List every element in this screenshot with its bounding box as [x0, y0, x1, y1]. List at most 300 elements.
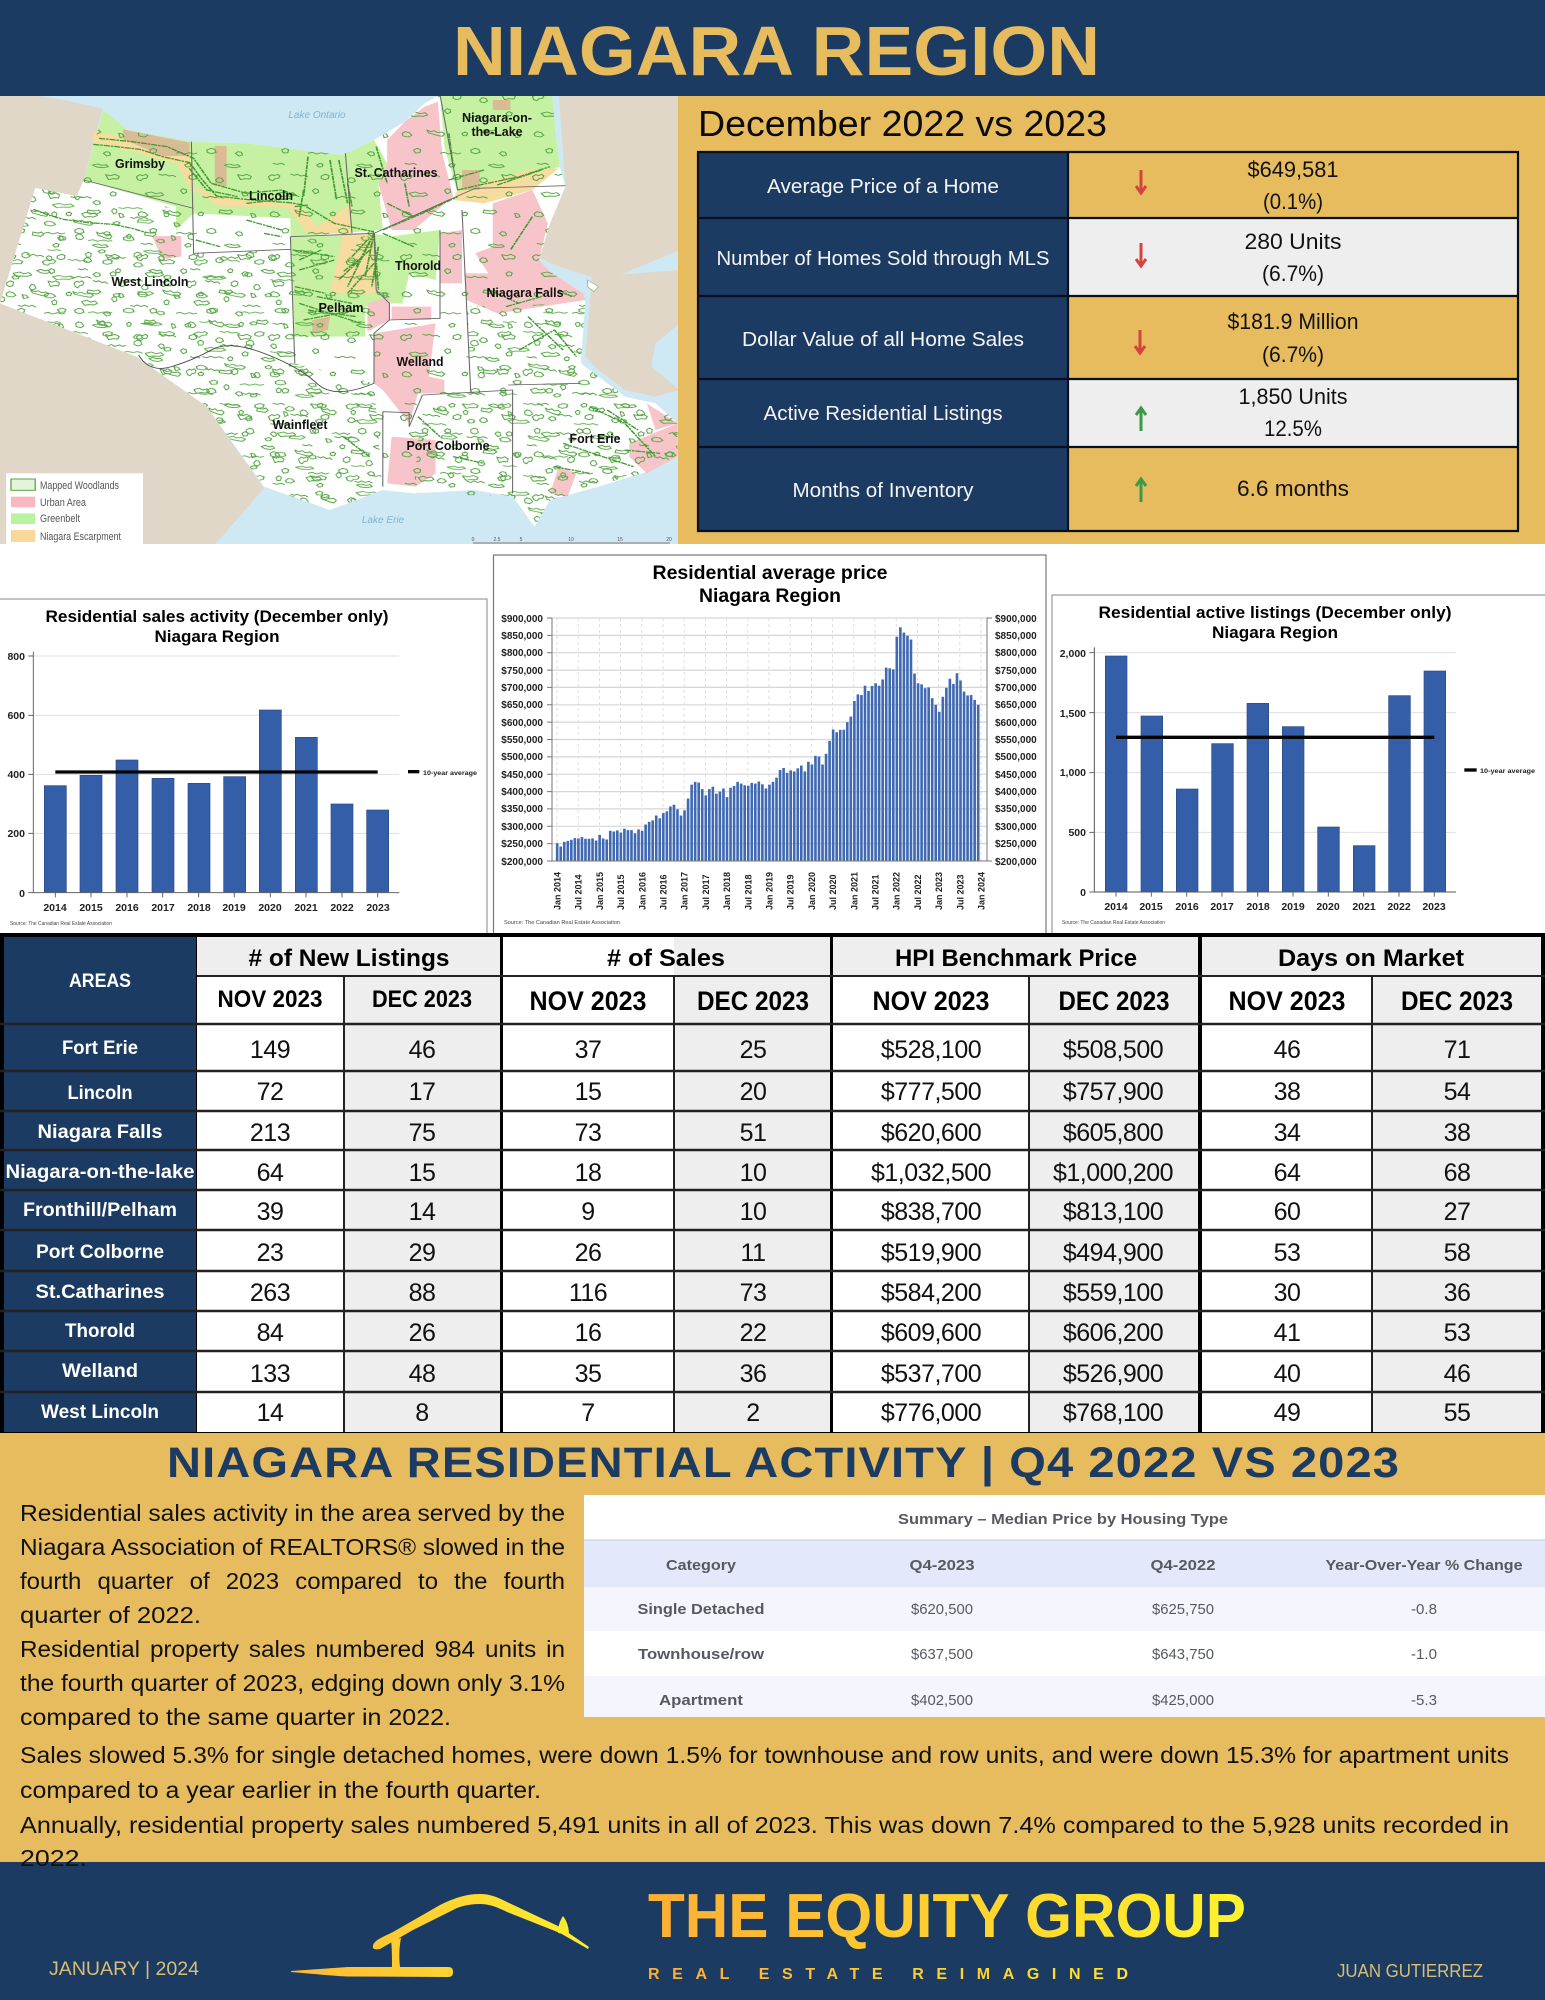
row: dollar value: (6.7%): [1262, 342, 1324, 367]
row: Welland: 133: [250, 1360, 290, 1388]
row: St.Catharines: 263: [250, 1279, 290, 1307]
chart title: Residential active listings (December only): [1098, 603, 1452, 622]
row: West Lincoln: 49: [1274, 1399, 1300, 1427]
row: St.Catharines: $559,100: [1063, 1279, 1163, 1307]
panel: Q4 residential activity: [0, 1433, 1545, 1863]
row: Fronthill/Pelham: $813,100: [1063, 1198, 1163, 1226]
row: average price: [767, 157, 1338, 214]
map scale bar: 5: [520, 537, 523, 543]
row: active listings: 12.5%: [1264, 416, 1322, 441]
map place names: Thorold: [395, 258, 441, 273]
axis labels: 400: [7, 769, 25, 781]
key figures table: [698, 152, 1518, 531]
row: Fronthill/Pelham: 27: [1444, 1198, 1470, 1226]
row: Fort Erie: 71: [1444, 1036, 1470, 1064]
logo tagline: REAL ESTATE REIMAGINED: [648, 1966, 1128, 1983]
chart: residential active listings: [1052, 595, 1545, 939]
source note: Source: The Canadian Real Estate Association: [10, 921, 112, 927]
areas column heading: AREAS: [69, 971, 131, 992]
summary table: median price by housing type: Single Detached: [638, 1601, 764, 1618]
panel: area statistics table: [0, 933, 1545, 1433]
date axis: Jan 2021: [849, 872, 859, 910]
axis labels: 2017: [1210, 901, 1234, 913]
row: months of inventory: [792, 476, 1349, 502]
row: homes sold: [716, 229, 1342, 286]
logo: house roof mark: [291, 1894, 589, 1977]
date axis: Jul 2016: [658, 874, 668, 910]
summary table: median price by housing type: $637,500: [911, 1646, 973, 1663]
chart title: Residential sales activity (December only): [46, 607, 388, 626]
date axis: Jul 2018: [743, 874, 753, 910]
row: Welland: 46: [1444, 1360, 1470, 1388]
row: active listings: [764, 384, 1348, 441]
summary table: median price by housing type: Apartment: [659, 1692, 743, 1709]
row: West Lincoln: West Lincoln: [41, 1402, 159, 1423]
row: St.Catharines: St.Catharines: [36, 1282, 164, 1303]
summary table: median price by housing type: Year-Over-Year % Change: [1326, 1557, 1522, 1574]
row: dollar value: Dollar Value of all Home Sales: [742, 329, 1024, 351]
row: Port Colborne: 23: [257, 1239, 283, 1267]
axis labels: [1060, 648, 1446, 913]
date axis: Jan 2014: [552, 872, 562, 910]
table group headings: HPI Benchmark Price: [895, 945, 1137, 972]
row: Thorold: 84: [257, 1319, 284, 1347]
body copy: residential activity narrative: Niagara Association of REALTORS® slowed in the: [20, 1534, 565, 1560]
axis labels: 0: [19, 888, 25, 900]
map place names: Niagara-on-: [462, 110, 532, 125]
row: Niagara-on-the-lake: Niagara-on-the-lake: [6, 1162, 194, 1183]
map place names: Pelham: [318, 300, 364, 315]
date axis: Jan 2019: [764, 872, 774, 910]
row: Welland: $526,900: [1063, 1360, 1163, 1388]
row: Niagara-on-the-lake: 68: [1444, 1159, 1470, 1187]
axis labels: 2018: [1246, 901, 1270, 913]
row: dollar value: [742, 309, 1358, 367]
row: West Lincoln: 14: [257, 1399, 284, 1427]
row: Fort Erie: 37: [575, 1036, 601, 1064]
axis labels: 2017: [151, 902, 175, 914]
table month headings: NOV 2023: [1228, 986, 1346, 1016]
table group headings: # of New Listings: [248, 945, 450, 972]
left price axis: $300,000: [501, 822, 543, 833]
right price axis: $750,000: [995, 666, 1037, 677]
axis labels: 2021: [294, 902, 318, 914]
row: Niagara-on-the-lake: 64: [257, 1159, 284, 1187]
map legend labels: Greenbelt: [40, 513, 80, 525]
source note: Source: The Canadian Real Estate Association: [1062, 920, 1165, 926]
left price axis: $650,000: [501, 700, 543, 711]
row: Port Colborne: Port Colborne: [36, 1242, 164, 1263]
body copy: residential activity narrative: 2022.: [20, 1845, 87, 1871]
row: Lincoln: 54: [1444, 1078, 1471, 1106]
right price axis: $550,000: [995, 735, 1037, 746]
chart: residential sales activity: [0, 599, 487, 939]
table group headings: # of Sales: [607, 945, 725, 972]
axis labels: 2015: [79, 902, 103, 914]
row: Fort Erie: 46: [409, 1036, 435, 1064]
map place names: St. Catharines: [354, 165, 438, 180]
summary table: median price by housing type: -5.3: [1411, 1692, 1437, 1709]
row: West Lincoln: 55: [1444, 1399, 1470, 1427]
map place names: [112, 110, 620, 526]
date axis: Jan 2018: [722, 872, 732, 910]
map scale bar: 2.5: [494, 537, 501, 543]
body copy: residential activity narrative: [20, 1500, 1509, 1871]
row: Thorold: $609,600: [881, 1319, 981, 1347]
chart title: Residential average price: [652, 563, 888, 584]
body copy: residential activity narrative: fourth quarter of 2023 compared to the fourth: [20, 1568, 565, 1594]
row: Fort Erie: $528,100: [881, 1036, 981, 1064]
axis labels: 500: [1068, 827, 1086, 839]
section heading: NIAGARA RESIDENTIAL ACTIVITY | Q4 2022 VS 2023: [167, 1439, 1400, 1487]
row: West Lincoln: 2: [746, 1399, 760, 1427]
row: Welland: $537,700: [881, 1360, 981, 1388]
row: Niagara Falls: $620,600: [881, 1119, 981, 1147]
date axis: Jul 2014: [574, 874, 584, 910]
axis labels: 2022: [330, 902, 354, 914]
map legend labels: Urban Area: [40, 497, 87, 509]
row: Fronthill/Pelham: 39: [257, 1198, 283, 1226]
row: homes sold: Number of Homes Sold through MLS: [716, 248, 1050, 270]
row: Fronthill/Pelham: 10: [740, 1198, 766, 1226]
row: Lincoln: 15: [575, 1078, 601, 1106]
map scale bar: 15: [617, 537, 623, 543]
row: St.Catharines: $584,200: [881, 1279, 981, 1307]
map place names: Wainfleet: [272, 417, 328, 432]
summary table: median price by housing type: Q4-2022: [1150, 1557, 1216, 1574]
row: Port Colborne: $519,900: [881, 1239, 981, 1267]
map scale bar: 0: [472, 537, 475, 543]
right price axis: $650,000: [995, 700, 1037, 711]
row: Niagara-on-the-lake: $1,000,200: [1053, 1159, 1173, 1187]
map place names: Lake Erie: [362, 515, 405, 526]
row: Port Colborne: $494,900: [1063, 1239, 1163, 1267]
row: Lincoln: [68, 1078, 1471, 1106]
row: Niagara-on-the-lake: $1,032,500: [871, 1159, 991, 1187]
footer banner: [0, 1862, 1545, 2000]
row: Lincoln: 72: [257, 1078, 283, 1106]
row: St.Catharines: 30: [1274, 1279, 1300, 1307]
row: Fronthill/Pelham: Fronthill/Pelham: [23, 1200, 177, 1221]
10-year average line: [1116, 732, 1434, 742]
row: Thorold: 41: [1274, 1319, 1300, 1347]
row: Niagara Falls: Niagara Falls: [38, 1122, 162, 1143]
row: average price: Average Price of a Home: [767, 176, 999, 198]
map place names: Fort Erie: [570, 431, 620, 446]
row: Niagara Falls: 73: [575, 1119, 601, 1147]
row: Fort Erie: 149: [250, 1036, 290, 1064]
row: Fronthill/Pelham: [23, 1198, 1470, 1226]
grid: [552, 618, 987, 844]
row: Thorold: $606,200: [1063, 1319, 1163, 1347]
date axis: Jan 2022: [892, 872, 902, 910]
title: NIAGARA REGION: [453, 12, 1100, 90]
row: Port Colborne: 29: [409, 1239, 435, 1267]
axis labels: 2019: [1281, 901, 1305, 913]
date axis: Jan 2015: [595, 872, 605, 910]
table month headings: NOV 2023: [872, 986, 990, 1016]
row: Fort Erie: Fort Erie: [62, 1038, 138, 1059]
row: homes sold: 280 Units: [1244, 229, 1342, 254]
row: active listings: Active Residential Listings: [764, 403, 1002, 425]
row: Niagara Falls: 75: [409, 1119, 435, 1147]
row: St.Catharines: 88: [409, 1279, 435, 1307]
body copy: residential activity narrative: compared to a year earlier in the fourth quarter.: [20, 1777, 541, 1803]
row: Thorold: 53: [1444, 1319, 1470, 1347]
date axis: Jul 2019: [786, 874, 796, 910]
table group headings: Days on Market: [1278, 945, 1464, 972]
left price axis: $350,000: [501, 804, 543, 815]
axis labels: 200: [7, 828, 25, 840]
axis labels: 600: [7, 710, 25, 722]
table month headings: NOV 2023: [530, 986, 646, 1016]
summary table: median price by housing type: $620,500: [911, 1601, 973, 1618]
date axis: Jan 2023: [934, 872, 944, 910]
body copy: residential activity narrative: Annually, residential property sales numbered 5,491 units in all of 2023. This was down 7.4% compared to the 5,928 units recorded in: [20, 1812, 1509, 1838]
date axis: Jul 2022: [913, 874, 923, 910]
axis labels: 2016: [1175, 901, 1199, 913]
chart: residential average price: [494, 555, 1046, 935]
body copy: residential activity narrative: compared to the same quarter in 2022.: [20, 1704, 451, 1730]
axis labels: 2019: [222, 902, 246, 914]
summary table: median price by housing type: -1.0: [1411, 1646, 1437, 1663]
right price axis: $450,000: [995, 770, 1037, 781]
row: Fort Erie: 25: [740, 1036, 766, 1064]
table month headings: NOV 2023: [218, 986, 322, 1013]
row: Thorold: [65, 1319, 1470, 1347]
date axis: Jul 2020: [828, 874, 838, 910]
row: St.Catharines: 36: [1444, 1279, 1470, 1307]
row: Lincoln: $777,500: [881, 1078, 981, 1106]
date axis: Jul 2021: [870, 874, 880, 910]
axis labels: 2014: [43, 902, 67, 914]
right price axis: $700,000: [995, 683, 1037, 694]
row: Niagara Falls: 34: [1274, 1119, 1301, 1147]
row: Port Colborne: 58: [1444, 1239, 1470, 1267]
left price axis: $600,000: [501, 718, 543, 729]
row: Niagara Falls: 38: [1444, 1119, 1470, 1147]
axis labels: 2016: [115, 902, 139, 914]
row: Niagara Falls: [38, 1119, 1470, 1147]
date axis: [552, 872, 986, 910]
row: West Lincoln: 7: [581, 1399, 595, 1427]
row: St.Catharines: [36, 1279, 1470, 1307]
row: St.Catharines: 73: [740, 1279, 766, 1307]
body copy: residential activity narrative: Residential property sales numbered 984 units in: [20, 1636, 565, 1662]
summary table: median price by housing type: $625,750: [1152, 1601, 1214, 1618]
right price axis: $300,000: [995, 822, 1037, 833]
map place names: Port Colborne: [406, 438, 490, 453]
axis labels: [7, 651, 390, 914]
date axis: Jan 2016: [637, 872, 647, 910]
body copy: residential activity narrative: quarter of 2022.: [20, 1602, 201, 1628]
table group headings: [248, 945, 1464, 972]
body copy: residential activity narrative: Residential sales activity in the area served by the: [20, 1500, 565, 1526]
map of the Niagara Region: [0, 95, 680, 544]
row: months of inventory: 6.6 months: [1237, 476, 1349, 501]
map place names: Lake Ontario: [288, 110, 346, 121]
map place names: Lincoln: [249, 188, 293, 203]
chart: residential active listings: Niagara Region: [1212, 623, 1338, 642]
row: Lincoln: 38: [1274, 1078, 1300, 1106]
axis labels: 2,000: [1060, 648, 1086, 660]
row: Thorold: 22: [740, 1319, 766, 1347]
right price axis: $350,000: [995, 804, 1037, 815]
map scale bar: 20: [666, 537, 672, 543]
map legend labels: Mapped Woodlands: [40, 480, 119, 492]
10-year average line: [55, 767, 378, 777]
row: Thorold: 26: [409, 1319, 435, 1347]
summary table: median price by housing type: Q4-2023: [910, 1557, 974, 1574]
axis labels: 2021: [1352, 901, 1376, 913]
bars and axes: [28, 652, 419, 897]
row: Port Colborne: [36, 1239, 1470, 1267]
summary table: median price by housing type: -0.8: [1411, 1601, 1437, 1618]
date axis: Jul 2015: [616, 874, 626, 910]
left price axis: $400,000: [501, 787, 543, 798]
row: active listings: 1,850 Units: [1238, 384, 1348, 409]
row: Niagara-on-the-lake: 64: [1274, 1159, 1301, 1187]
date axis: Jan 2017: [680, 872, 690, 910]
row: Fort Erie: $508,500: [1063, 1036, 1163, 1064]
row: Lincoln: $757,900: [1063, 1078, 1163, 1106]
row: Fort Erie: 46: [1274, 1036, 1300, 1064]
row: Thorold: Thorold: [65, 1321, 135, 1342]
left price axis: $750,000: [501, 666, 543, 677]
row: Fronthill/Pelham: 14: [409, 1198, 436, 1226]
summary table: median price by housing type: $402,500: [911, 1692, 973, 1709]
row: Welland: 40: [1274, 1360, 1300, 1388]
chart: residential active listings: 10-year average: [1480, 768, 1535, 775]
left price axis: $850,000: [501, 631, 543, 642]
left price axis: $200,000: [501, 857, 543, 868]
row: Niagara-on-the-lake: 15: [409, 1159, 435, 1187]
row: Welland: [62, 1360, 1470, 1388]
summary table: median price by housing type: $425,000: [1152, 1692, 1214, 1709]
right price axis: $850,000: [995, 631, 1037, 642]
bars and axes: [1089, 647, 1477, 897]
monthly price bars: [556, 627, 980, 861]
left price axis: $550,000: [501, 735, 543, 746]
row: Lincoln: 20: [740, 1078, 766, 1106]
map place names: the-Lake: [472, 124, 522, 139]
row: homes sold: (6.7%): [1262, 261, 1324, 286]
map place names: West Lincoln: [112, 274, 189, 289]
axes: [547, 618, 992, 861]
body copy: residential activity narrative: Sales slowed 5.3% for single detached homes, were down 1.5% for townhouse and row units, and were down 15.3% for apartment units: [20, 1742, 1509, 1768]
body copy: residential activity narrative: the fourth quarter of 2023, edging down only 3.1%: [20, 1670, 565, 1696]
row: Lincoln: 17: [409, 1078, 435, 1106]
map scale bar: [472, 537, 672, 543]
logo wordmark: THE EQUITY GROUP: [648, 1882, 1246, 1951]
right price axis: [995, 614, 1037, 868]
row: Lincoln: Lincoln: [68, 1083, 132, 1104]
right price axis: $200,000: [995, 857, 1037, 868]
row: West Lincoln: $776,000: [881, 1399, 981, 1427]
left price axis: $700,000: [501, 683, 543, 694]
map scale bar: 10: [568, 537, 574, 543]
panel: December 2022 vs 2023: [678, 96, 1545, 544]
left price axis: $500,000: [501, 752, 543, 763]
axis labels: 2014: [1104, 901, 1128, 913]
summary table: median price by housing type: Summary – Median Price by Housing Type: [898, 1511, 1228, 1528]
left price axis: $450,000: [501, 770, 543, 781]
axis labels: 2018: [187, 902, 211, 914]
row: dollar value: $181.9 Million: [1228, 309, 1358, 334]
row: Fronthill/Pelham: $838,700: [881, 1198, 981, 1226]
row: West Lincoln: [41, 1399, 1470, 1427]
row: Niagara Falls: $605,800: [1063, 1119, 1163, 1147]
row: St.Catharines: 116: [569, 1279, 607, 1307]
row: Port Colborne: 53: [1274, 1239, 1300, 1267]
footer date: JANUARY | 2024: [49, 1959, 199, 1980]
left price axis: [501, 614, 543, 868]
row: Fronthill/Pelham: 60: [1274, 1198, 1300, 1226]
row: Niagara-on-the-lake: 18: [575, 1159, 601, 1187]
row: Niagara Falls: 51: [740, 1119, 766, 1147]
axis labels: 0: [1080, 887, 1086, 899]
axis labels: 2022: [1387, 901, 1411, 913]
panel heading: December 2022 vs 2023: [698, 103, 1107, 144]
map place names: Niagara Falls: [486, 285, 564, 300]
summary table: median price by housing type: Category: [666, 1557, 737, 1574]
right price axis: $600,000: [995, 718, 1037, 729]
row: Welland: 35: [575, 1360, 601, 1388]
chart: residential sales activity: Niagara Region: [154, 627, 280, 646]
axis labels: 2020: [1316, 901, 1340, 913]
row: Niagara-on-the-lake: 10: [740, 1159, 766, 1187]
axis labels: 2020: [258, 902, 282, 914]
row: Welland: 48: [409, 1360, 435, 1388]
map legend labels: [40, 480, 121, 543]
right price axis: $800,000: [995, 648, 1037, 659]
right price axis: $250,000: [995, 839, 1037, 850]
right price axis: $400,000: [995, 787, 1037, 798]
row: Welland: 36: [740, 1360, 766, 1388]
source note: Source: The Canadian Real Estate Association: [504, 920, 620, 926]
map place names: Grimsby: [115, 156, 166, 171]
table month headings: DEC 2023: [697, 986, 809, 1016]
axis labels: 2015: [1139, 901, 1163, 913]
axis labels: 800: [7, 651, 25, 663]
right price axis: $500,000: [995, 752, 1037, 763]
header banner: [0, 0, 1545, 96]
left price axis: $250,000: [501, 839, 543, 850]
summary table: median price by housing type: $643,750: [1152, 1646, 1214, 1663]
table month headings: [218, 986, 1513, 1016]
chart: residential sales activity: 10-year average: [423, 770, 477, 777]
map place names: Welland: [396, 354, 444, 369]
row: Fort Erie: [62, 1036, 1470, 1064]
date axis: Jan 2020: [807, 872, 817, 910]
date axis: Jul 2017: [701, 874, 711, 910]
row: Port Colborne: 26: [575, 1239, 601, 1267]
axis labels: 1,000: [1060, 767, 1086, 779]
row: West Lincoln: $768,100: [1063, 1399, 1163, 1427]
date axis: Jul 2023: [955, 874, 965, 910]
chart: residential average price: Niagara Region: [699, 586, 841, 607]
axis labels: 2023: [1422, 901, 1446, 913]
left price axis: $800,000: [501, 648, 543, 659]
row: average price: (0.1%): [1263, 189, 1323, 214]
row: West Lincoln: 8: [415, 1399, 429, 1427]
row: Port Colborne: 11: [741, 1239, 765, 1267]
right price axis: $900,000: [995, 614, 1037, 625]
table month headings: DEC 2023: [1401, 986, 1513, 1016]
row: average price: $649,581: [1248, 157, 1338, 182]
left price axis: $900,000: [501, 614, 543, 625]
row: Thorold: 16: [575, 1319, 601, 1347]
